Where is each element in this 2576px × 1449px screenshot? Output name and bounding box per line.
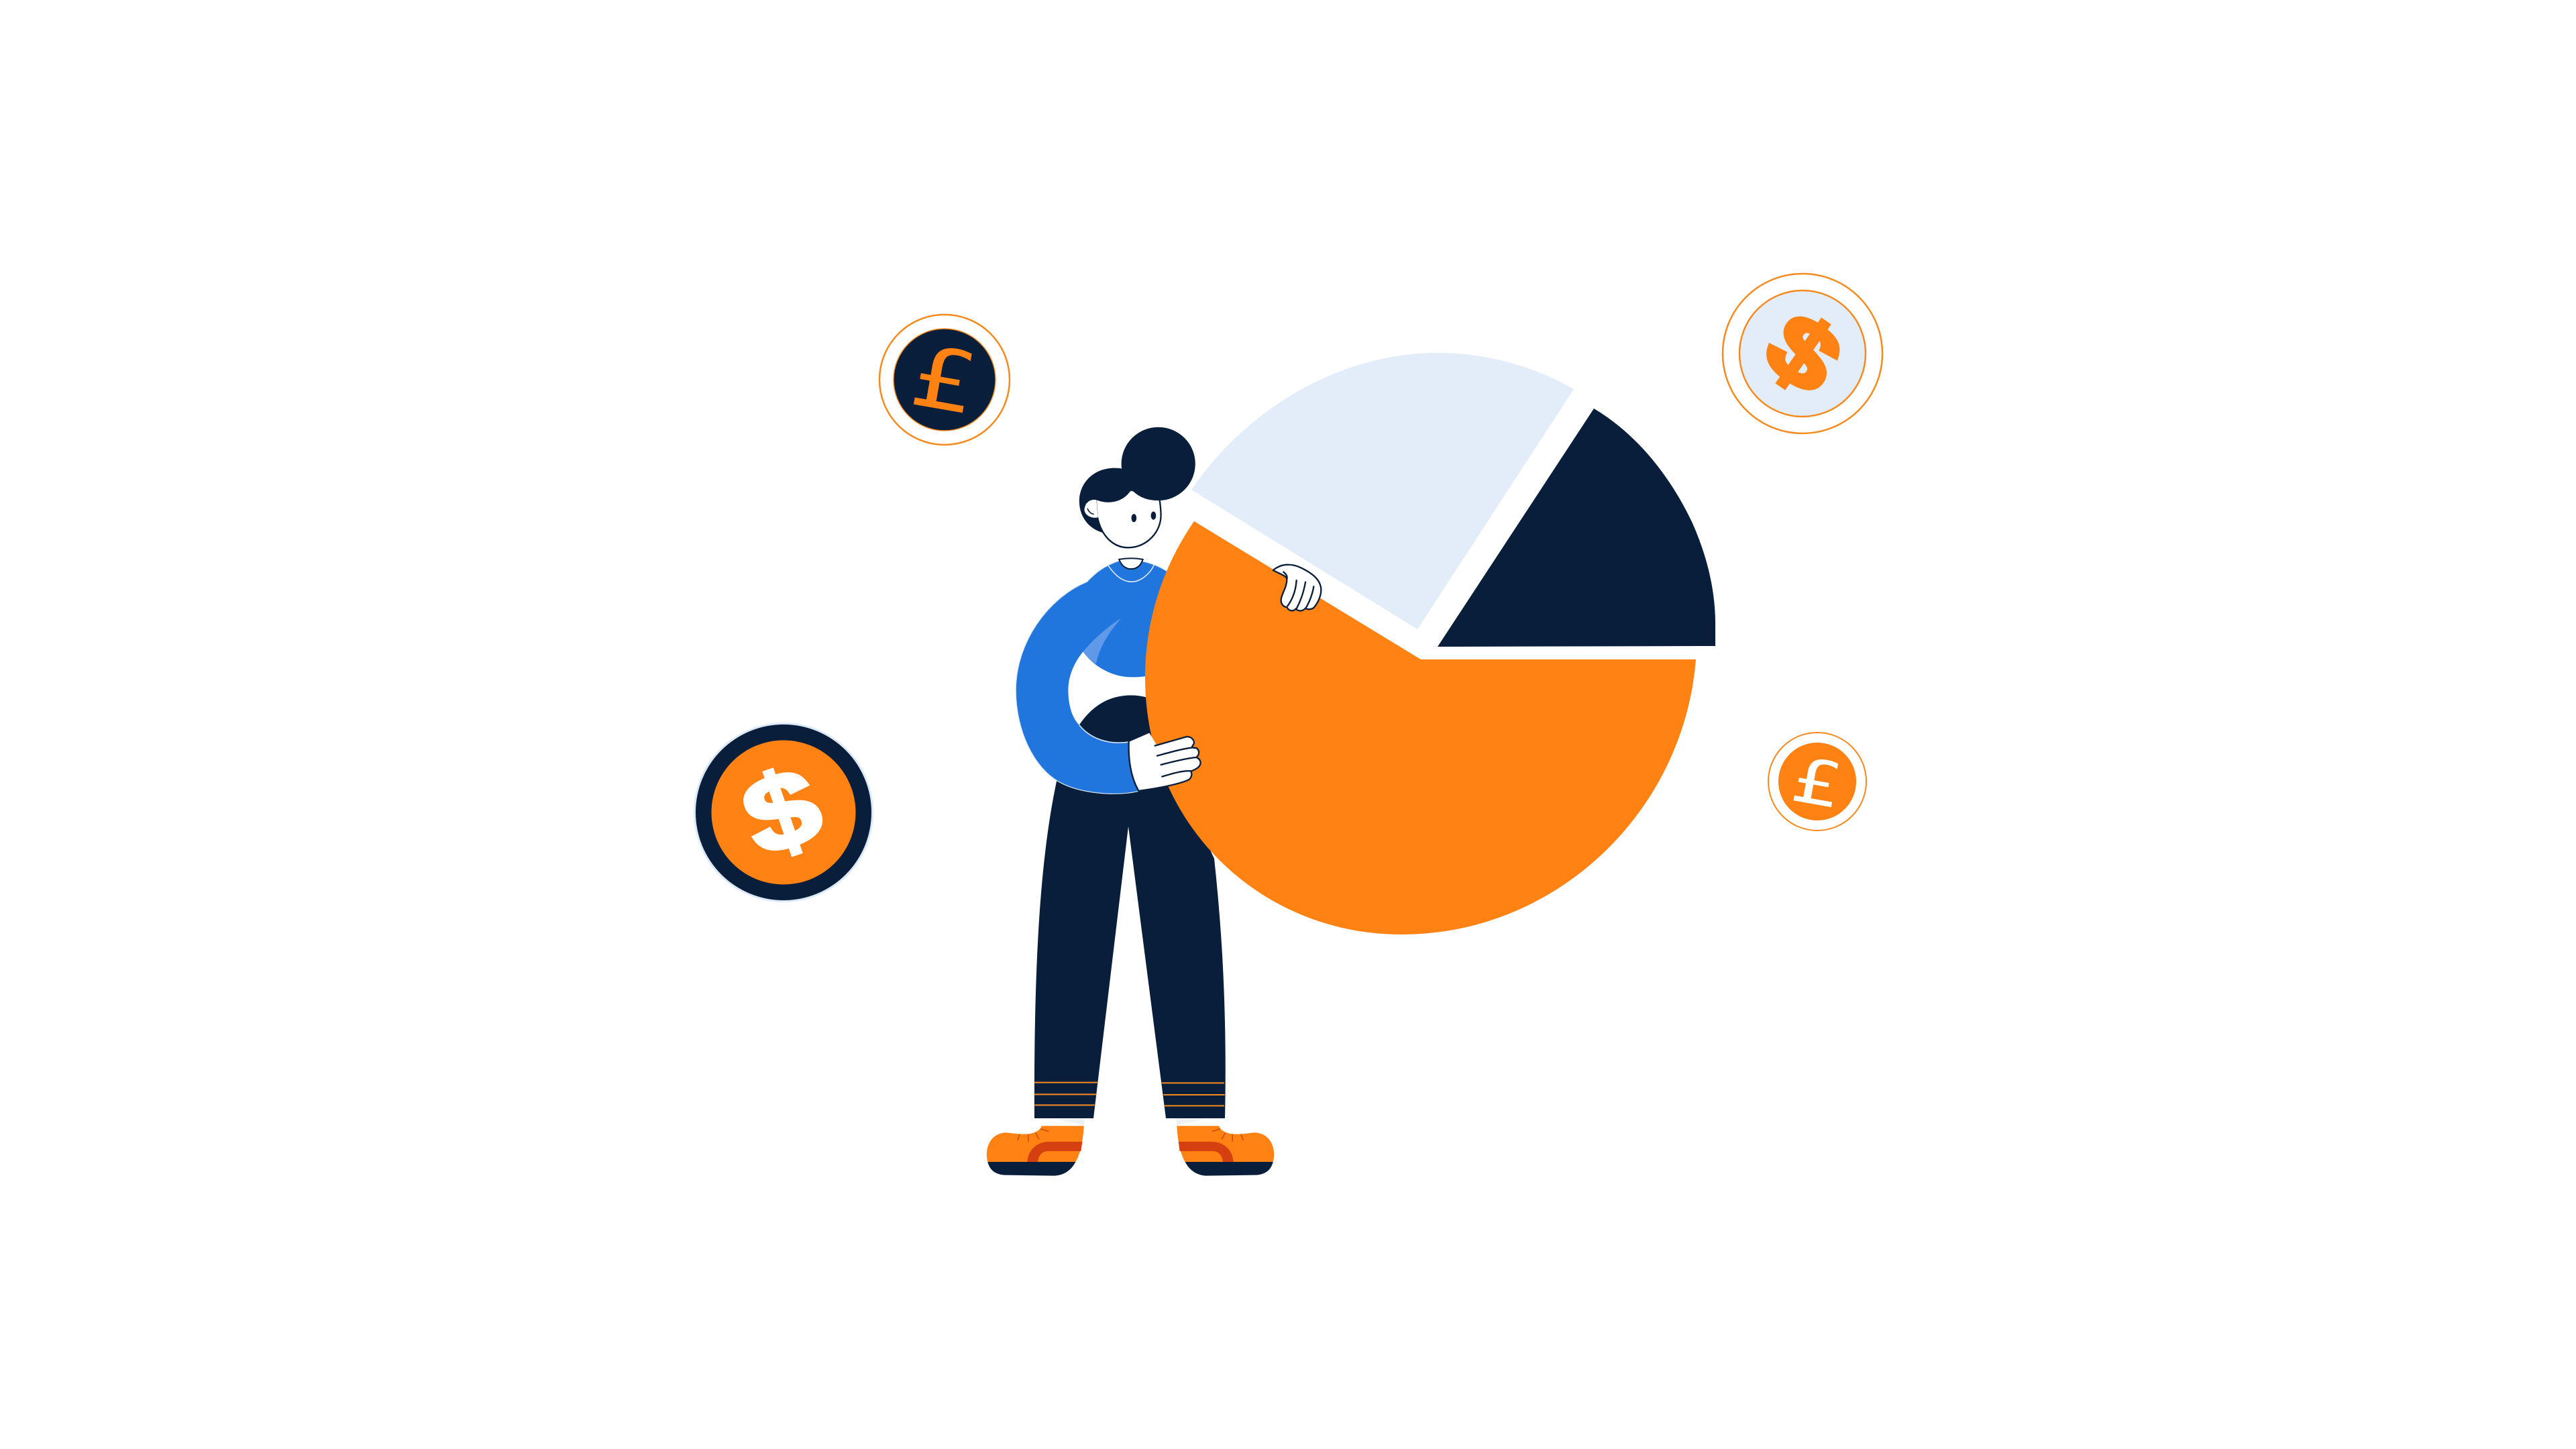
trouser stripes — [1034, 1083, 1225, 1106]
coin: pound top left: £ — [904, 327, 985, 434]
trousers — [1034, 771, 1226, 1118]
coin: dollar top right: $ — [1748, 292, 1860, 414]
pie slice: light blue — [1191, 353, 1574, 629]
waist seen through arm — [1079, 696, 1152, 743]
left eye — [1132, 514, 1136, 522]
person: body and head — [987, 427, 1274, 1176]
coin: large dollar left: $ — [729, 744, 835, 879]
pie slice: orange — [1145, 521, 1696, 934]
coin: pound top left — [879, 315, 1010, 445]
hand: lower on pie — [1129, 733, 1201, 791]
sweater and head — [1016, 427, 1195, 794]
hair — [1079, 468, 1178, 533]
coin: pound bottom right: £ — [1786, 743, 1848, 822]
coin: large dollar left — [694, 722, 873, 902]
ear — [1084, 500, 1098, 518]
collar — [1108, 564, 1155, 582]
belly edge line — [1079, 725, 1129, 743]
right eye — [1151, 511, 1156, 520]
face — [1096, 490, 1161, 547]
arm fold highlight — [1083, 619, 1121, 664]
left shoe — [987, 1118, 1085, 1176]
ear line — [1087, 508, 1094, 515]
sweater with curved arm — [1016, 559, 1171, 794]
coin: pound bottom right — [1768, 733, 1866, 830]
hair bun — [1122, 427, 1195, 500]
hand: upper on pie edge — [1273, 565, 1321, 611]
coin: dollar top right — [1723, 274, 1882, 433]
right shoe — [1176, 1118, 1274, 1176]
neck — [1119, 558, 1143, 569]
pie slice: navy — [1438, 409, 1715, 647]
gap between arm and body — [1068, 651, 1150, 725]
